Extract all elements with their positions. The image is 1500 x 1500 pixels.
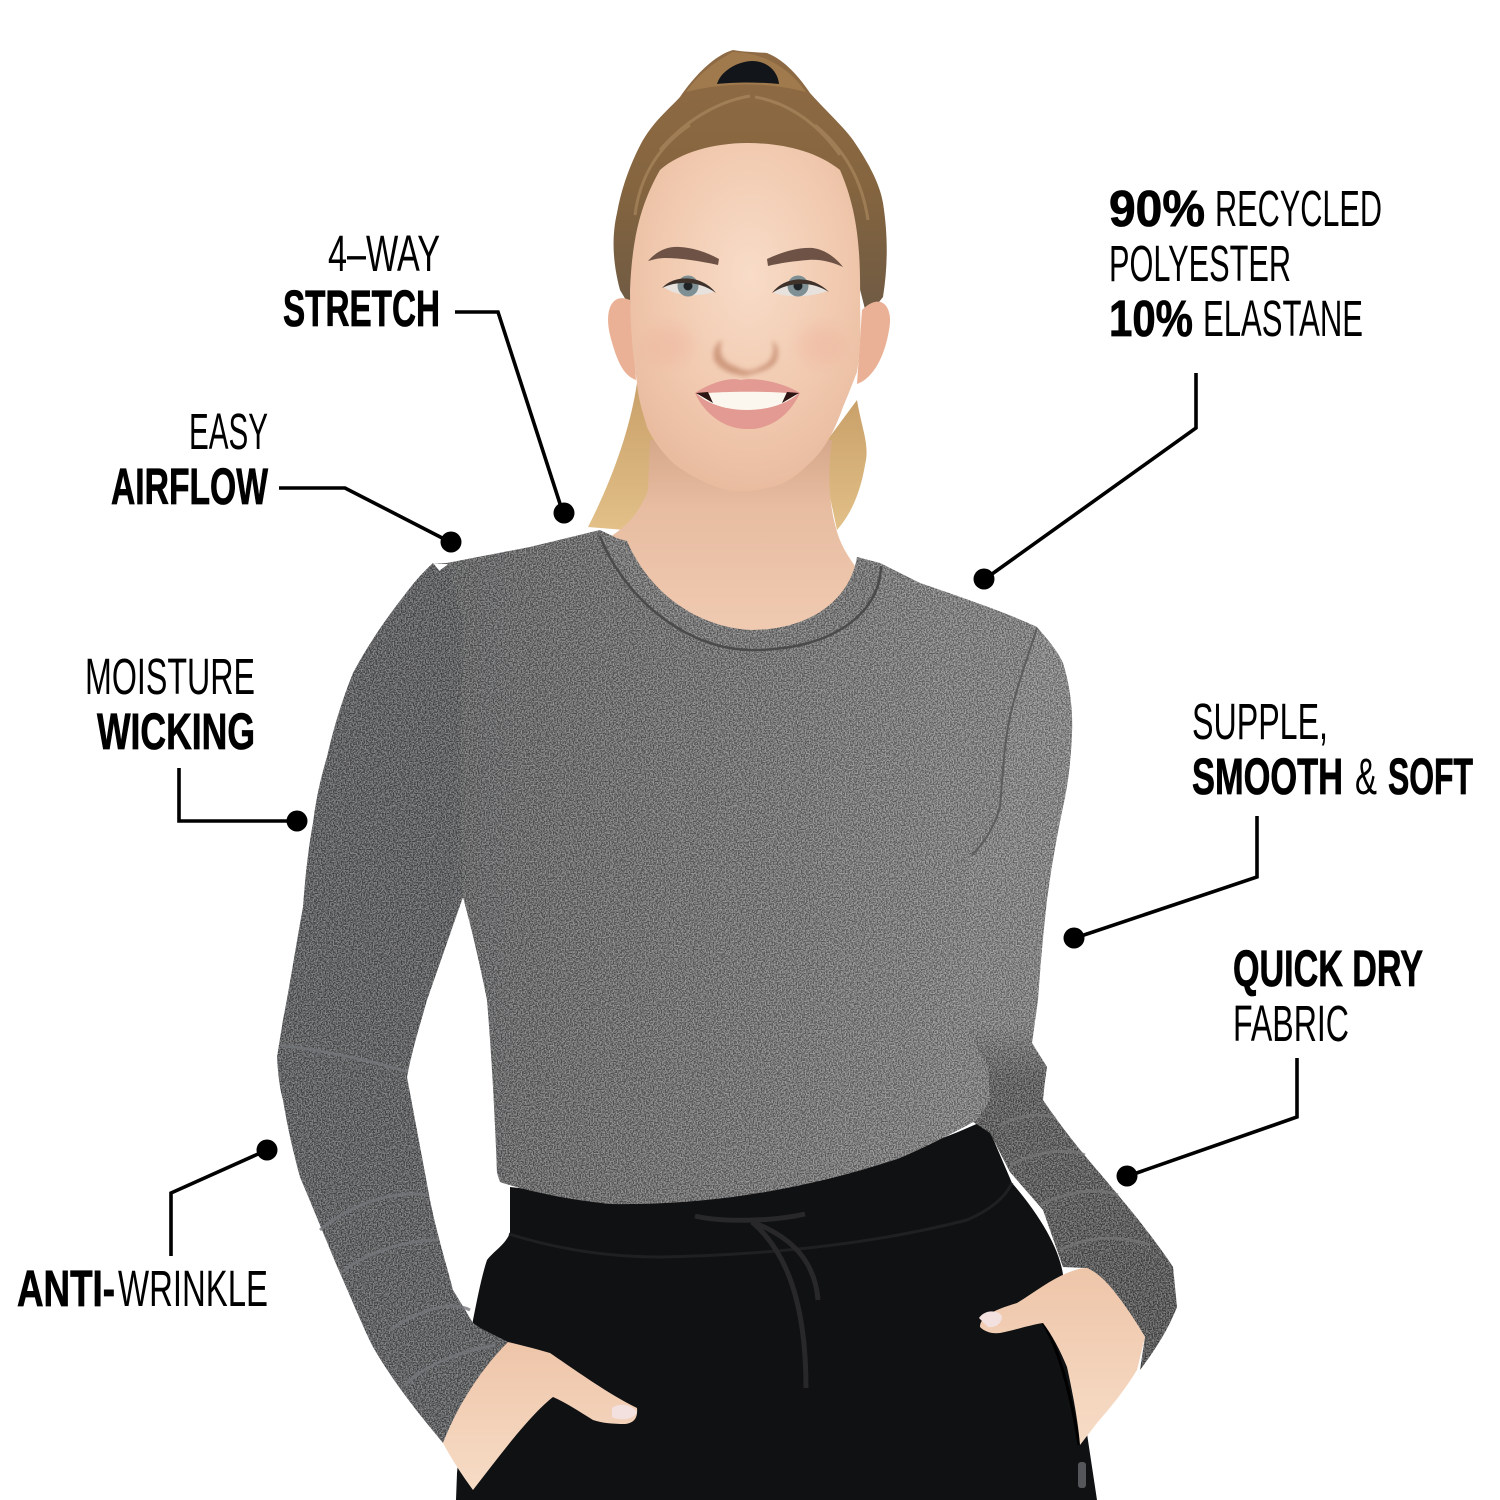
callout: anti-wrinkle: ANTI-	[17, 1260, 115, 1317]
right hand in pocket	[980, 1268, 1145, 1445]
callout: fabric composition: ELASTANE	[1203, 290, 1363, 347]
callout: quick dry fabric	[1116, 940, 1423, 1186]
hair strands	[635, 96, 868, 220]
nose	[713, 340, 778, 376]
right arm sleeve	[930, 627, 1177, 1370]
callout: easy airflow	[111, 403, 462, 552]
hair tie	[717, 61, 779, 84]
callout: moisture wicking: WICKING	[97, 703, 255, 760]
callout: supple, smooth and soft: SMOOTH	[1192, 748, 1343, 805]
torso of top	[447, 530, 1037, 1204]
hair	[614, 50, 887, 317]
callout: 4-way stretch: STRETCH	[283, 280, 440, 337]
left arm sleeve	[277, 563, 508, 1443]
left sleeve wrinkles	[280, 1045, 495, 1385]
callout: fabric composition	[974, 180, 1382, 590]
callout: supple, smooth and soft: SUPPLE,	[1192, 693, 1328, 750]
callout: easy airflow: EASY	[189, 403, 268, 460]
callout: fabric composition: 10%	[1109, 290, 1193, 347]
face	[630, 143, 860, 491]
callout: fabric composition: 90%	[1109, 180, 1205, 237]
collar seam	[600, 536, 881, 650]
callout: anti-wrinkle: WRINKLE	[118, 1260, 268, 1317]
callout: supple, smooth and soft: &	[1355, 748, 1377, 805]
callout: moisture wicking	[85, 648, 308, 832]
right fingernail	[979, 1311, 1002, 1327]
ponytail behind neck	[588, 383, 867, 530]
mouth	[695, 379, 800, 429]
callout: fabric composition: POLYESTER	[1109, 235, 1291, 292]
photo: woman in grey long-sleeve top	[277, 50, 1177, 1500]
left fingernail	[612, 1405, 637, 1419]
callout: moisture wicking: MOISTURE	[85, 648, 255, 705]
right sleeve wrinkles	[1000, 1115, 1150, 1250]
pocket zip pull	[1078, 1462, 1086, 1488]
cheeks	[644, 325, 692, 365]
pocket edge	[1043, 1323, 1079, 1445]
drawstring	[695, 1214, 818, 1388]
crew neck collar	[600, 534, 880, 650]
left hand in pocket	[443, 1342, 637, 1490]
callout: anti-wrinkle	[17, 1140, 278, 1317]
ears	[608, 298, 890, 384]
eyebrows	[648, 247, 719, 265]
callout: 4-way stretch: 4–WAY	[328, 225, 440, 282]
waistband fold	[509, 1183, 1012, 1257]
neck	[610, 440, 862, 640]
sleeve seam	[972, 628, 1037, 855]
callout: quick dry fabric: FABRIC	[1233, 995, 1349, 1052]
callout: fabric composition: RECYCLED	[1215, 180, 1382, 237]
callout: easy airflow: AIRFLOW	[111, 458, 269, 515]
jogger pants	[456, 1120, 1097, 1500]
callout: 4-way stretch	[283, 225, 574, 524]
callout: supple, smooth and soft	[1064, 693, 1473, 948]
eyes	[663, 280, 714, 295]
